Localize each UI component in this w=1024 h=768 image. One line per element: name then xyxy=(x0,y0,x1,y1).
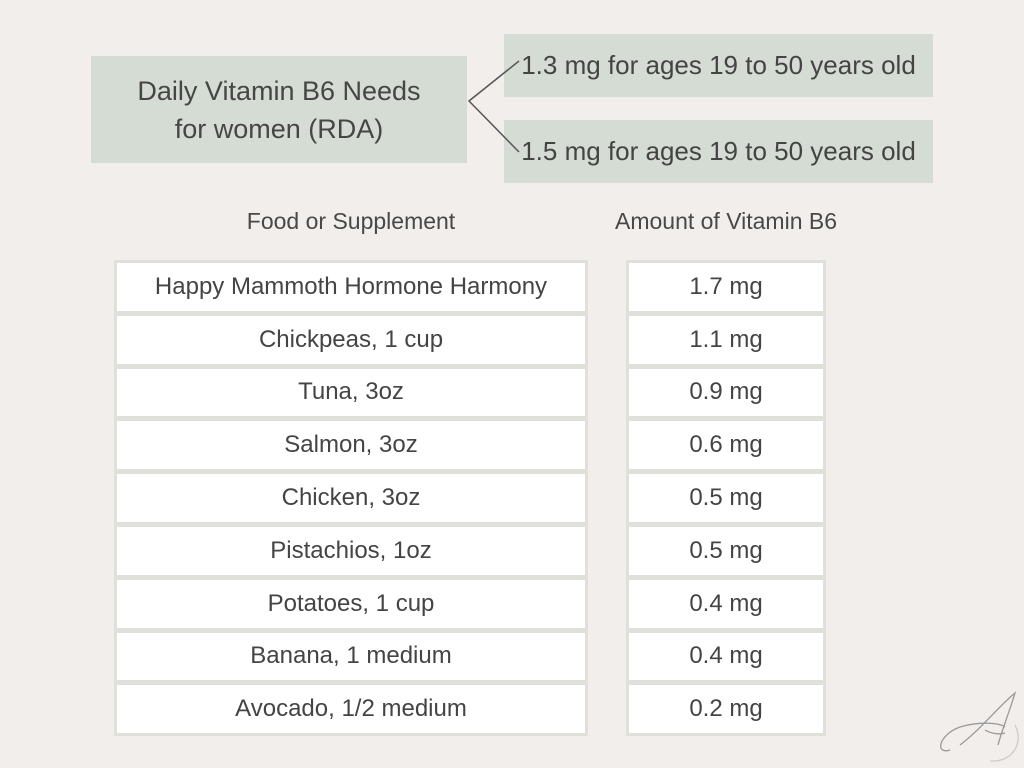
callout: 1.5 mg xyxy=(504,120,933,183)
table: foods: Banana, 1 medium xyxy=(250,642,452,669)
table: amounts: 1.1 mg xyxy=(689,326,763,353)
callout: 1.3 mg xyxy=(504,34,933,97)
table: amounts: 0.4 mg xyxy=(689,642,763,669)
table: foods: Happy Mammoth Hormone Harmony xyxy=(155,273,547,300)
table: foods: Pistachios, 1oz xyxy=(270,537,432,564)
table: foods: Potatoes, 1 cup xyxy=(268,590,434,617)
column header: food: Food or Supplement xyxy=(247,208,455,234)
table: foods xyxy=(114,260,588,736)
table: foods: Chickpeas, 1 cup xyxy=(259,326,443,353)
title box: daily vitamin B6 needs xyxy=(91,56,467,163)
logo: script A xyxy=(940,691,1019,762)
table: amounts: 1.7 mg xyxy=(689,273,763,300)
table: amounts: 0.5 mg xyxy=(689,537,763,564)
title box: daily vitamin B6 needs: for women (RDA) xyxy=(175,114,383,144)
table: foods: Tuna, 3oz xyxy=(298,378,404,405)
table: amounts: 0.9 mg xyxy=(689,378,763,405)
table: amounts: 0.6 mg xyxy=(689,431,763,458)
table: amounts: 0.5 mg xyxy=(689,484,763,511)
title box: daily vitamin B6 needs: Daily Vitamin B6 Needs xyxy=(137,76,421,106)
table: amounts: 0.4 mg xyxy=(689,590,763,617)
table: foods: Chicken, 3oz xyxy=(282,484,420,511)
table: foods: Avocado, 1/2 medium xyxy=(235,695,467,722)
column header: amount: Amount of Vitamin B6 xyxy=(615,208,837,234)
callout: 1.5 mg: 1.5 mg for ages 19 to 50 years old xyxy=(521,136,916,166)
table: foods: Salmon, 3oz xyxy=(284,431,418,458)
callout: 1.3 mg: 1.3 mg for ages 19 to 50 years old xyxy=(521,50,916,80)
table: amounts: 0.2 mg xyxy=(689,695,763,722)
table: amounts xyxy=(626,260,826,736)
